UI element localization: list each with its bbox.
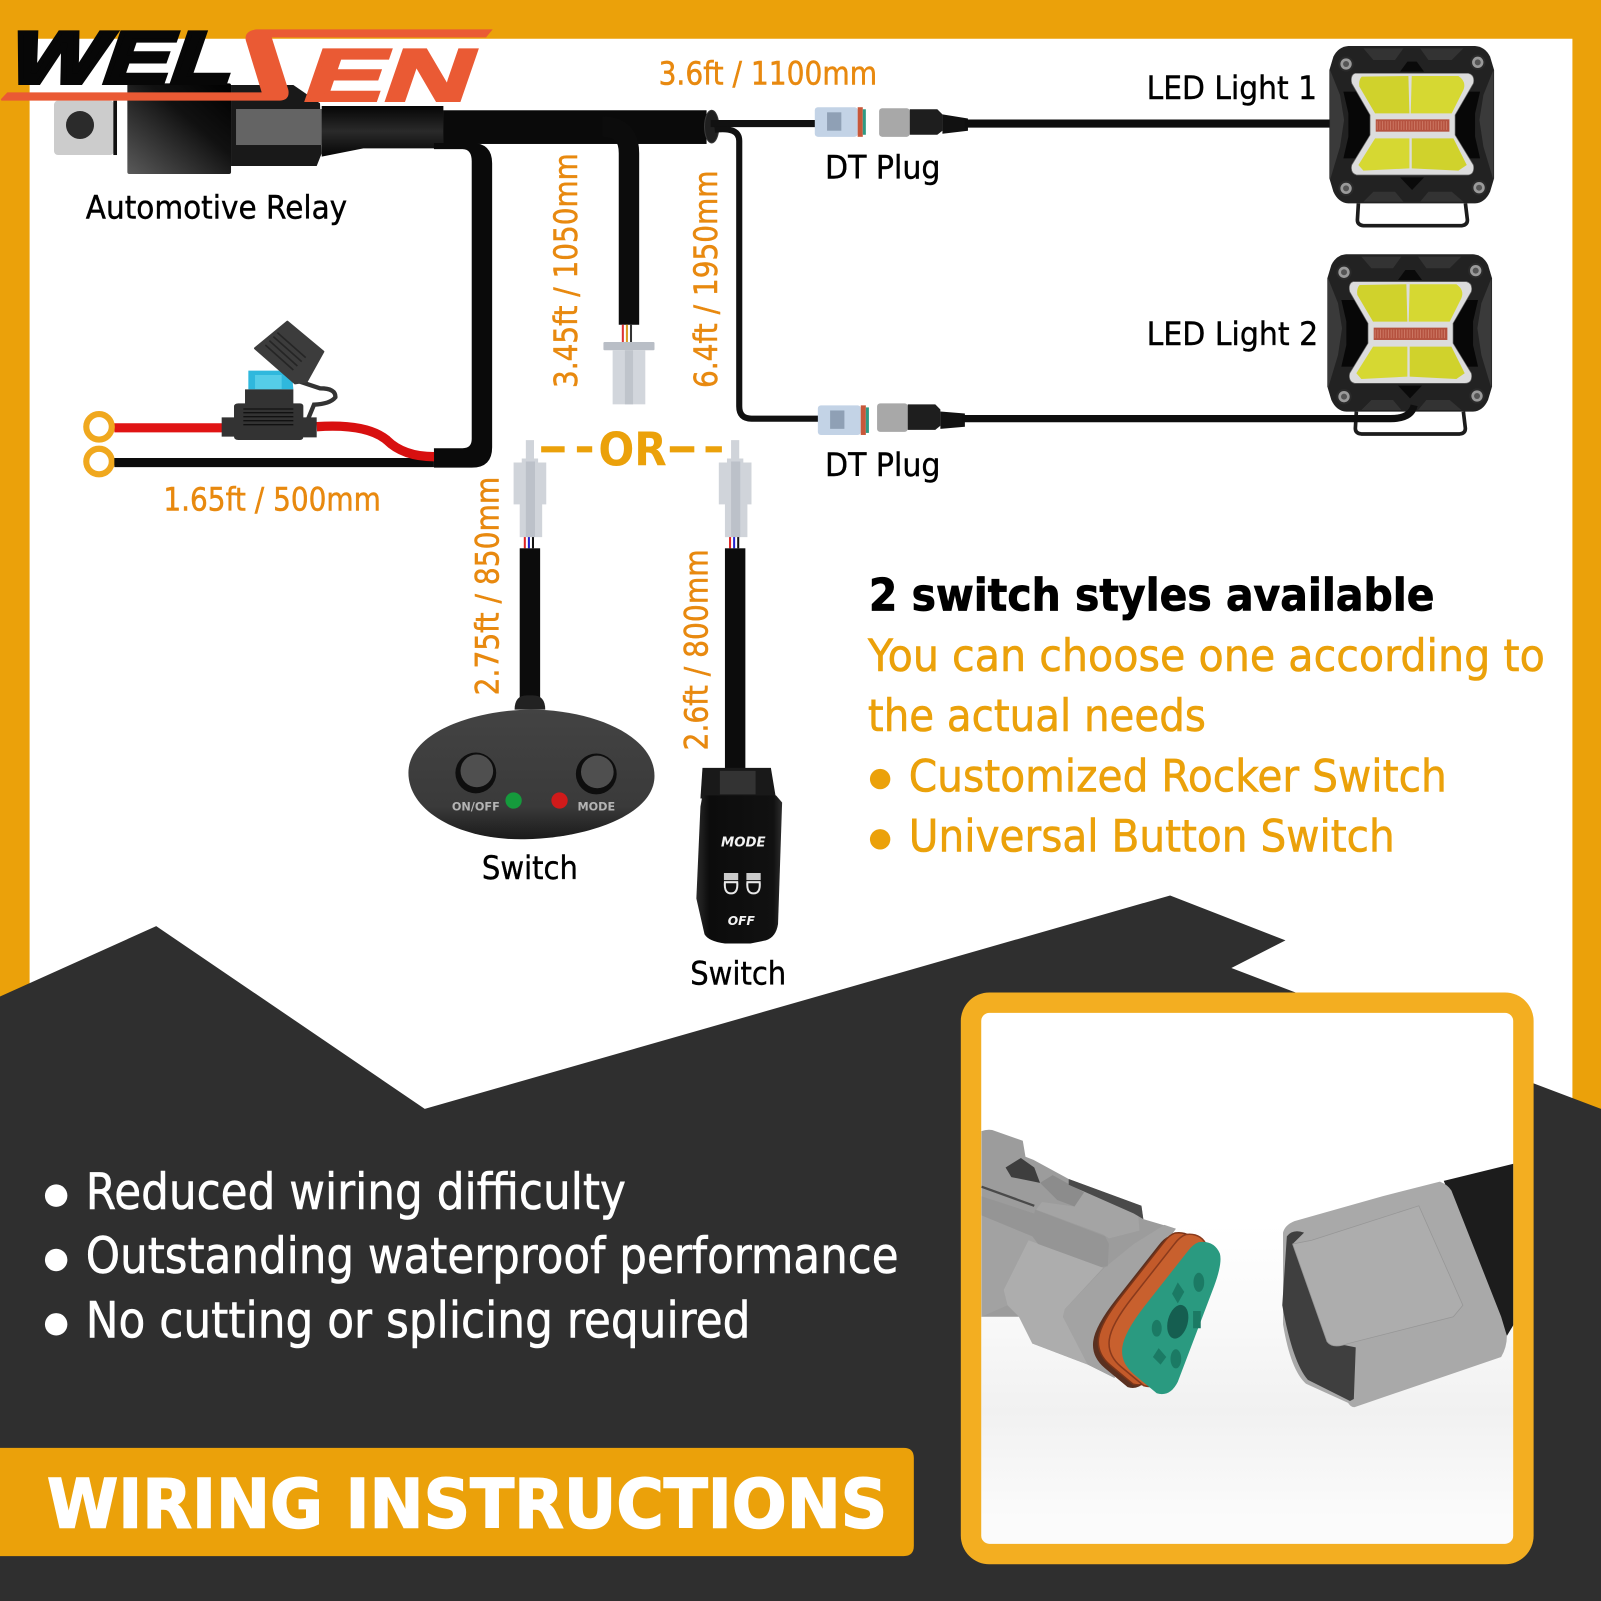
black wire xyxy=(114,458,434,467)
DT plug 1 xyxy=(815,107,968,137)
bullet 2 xyxy=(45,1249,67,1271)
connector photo xyxy=(981,1130,1514,1407)
option 2: Universal Button Switch xyxy=(909,810,1395,863)
description line 2: the actual needs xyxy=(868,689,1206,742)
length label: right switch: 2.6ft / 800mm xyxy=(680,549,716,750)
right switch cable xyxy=(725,548,745,771)
label: button switch: Switch xyxy=(482,851,578,887)
length label: fuse wires: 1.65ft / 500mm xyxy=(163,483,381,519)
heading: 2 switch styles available xyxy=(869,569,1435,622)
main harness cable xyxy=(443,110,823,419)
right switch connector xyxy=(719,440,751,548)
red wire right xyxy=(317,426,434,457)
fuse holder xyxy=(222,389,317,440)
right connector cable xyxy=(1444,1164,1514,1336)
option 1: Customized Rocker Switch xyxy=(909,749,1447,802)
left connector body xyxy=(981,1130,1176,1378)
description line 1: You can choose one according to xyxy=(867,629,1545,682)
gasket rings xyxy=(1093,1233,1208,1388)
benefit 3: No cutting or splicing required xyxy=(86,1292,750,1350)
teal seal xyxy=(1122,1242,1221,1394)
orange frame xyxy=(0,0,1601,1123)
fuse strap xyxy=(300,382,335,418)
logo xyxy=(0,18,493,117)
red wire left xyxy=(114,423,227,432)
DT plug 2 xyxy=(818,403,965,435)
power cable to fuse xyxy=(434,143,492,468)
wire to LED light 2 xyxy=(962,405,1414,419)
fuse cap xyxy=(255,322,323,383)
button switch xyxy=(408,695,654,839)
switch styles text block xyxy=(867,569,1545,863)
logo swoosh S xyxy=(1,29,493,101)
label: LED light 1: LED Light 1 xyxy=(1147,71,1317,107)
logo word EN: EN xyxy=(293,35,489,117)
bullet 3 xyxy=(45,1313,67,1336)
dark background shape xyxy=(0,895,1601,1601)
button switch: MODE xyxy=(577,801,615,814)
switch branch cable xyxy=(602,127,629,325)
benefit 1: Reduced wiring difficulty xyxy=(86,1163,626,1221)
LED light 1 xyxy=(1329,46,1494,226)
right connector key xyxy=(1293,1206,1463,1346)
label: DT plug 1: DT Plug xyxy=(825,151,940,187)
title banner xyxy=(0,1448,914,1556)
label: LED light 2: LED Light 2 xyxy=(1147,317,1318,353)
bullet 1 xyxy=(45,1184,67,1207)
benefit 2: Outstanding waterproof performance xyxy=(86,1227,899,1285)
label: DT plug 2: DT Plug xyxy=(825,448,940,484)
rocker switch: MODE xyxy=(721,835,766,850)
ring terminals xyxy=(86,414,112,474)
length label: left switch: 2.75ft / 850mm xyxy=(470,477,506,695)
OR divider: OR xyxy=(598,423,667,477)
automotive relay xyxy=(54,83,443,174)
left switch cable xyxy=(520,548,540,697)
bullet 2 xyxy=(870,829,890,850)
switch branch connector xyxy=(603,325,654,404)
fuse blade xyxy=(248,371,293,389)
title: WIRING INSTRUCTIONS xyxy=(47,1464,887,1543)
logo word WEL: WEL xyxy=(0,18,250,100)
length label: switch branch: 3.45ft / 1050mm xyxy=(549,153,585,388)
connector photo panel xyxy=(961,992,1534,1564)
bullet 1 xyxy=(870,769,890,789)
length label: light 2 branch: 6.4ft / 1950mm xyxy=(689,171,725,388)
right connector shell xyxy=(1283,1182,1507,1407)
right connector opening xyxy=(1282,1231,1356,1401)
benefits list xyxy=(45,1163,899,1350)
length label: relay to lights: 3.6ft / 1100mm xyxy=(659,57,877,93)
left switch connector xyxy=(514,440,546,548)
button switch: ON/OFF xyxy=(452,801,500,814)
rocker switch xyxy=(696,768,782,943)
label: rocker switch: Switch xyxy=(690,956,786,992)
rocker switch: OFF xyxy=(728,914,755,928)
wire to LED light 1 xyxy=(965,120,1332,128)
LED light 2 xyxy=(1327,254,1492,434)
label: automotive relay: Automotive Relay xyxy=(86,191,347,227)
fuse assembly xyxy=(222,322,434,457)
